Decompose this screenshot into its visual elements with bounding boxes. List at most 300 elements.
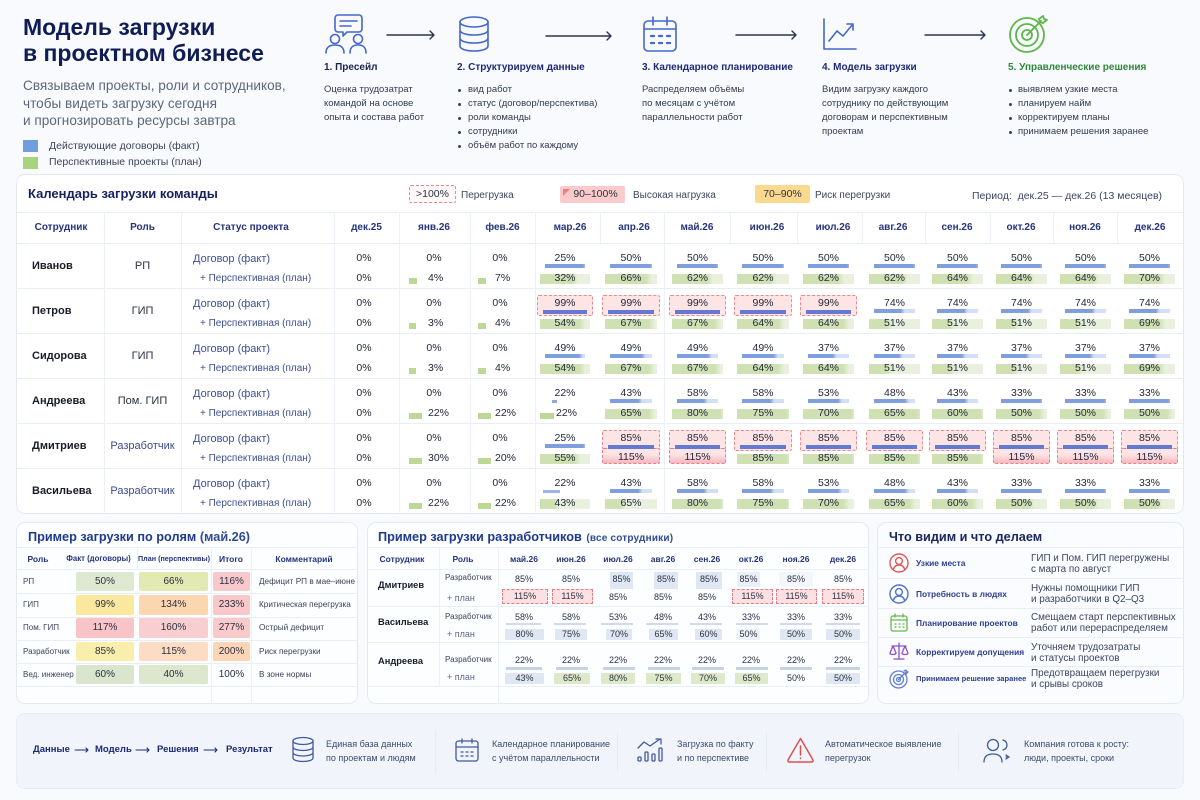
role: Вед. инженер: В зоне нормы <box>259 670 311 679</box>
row: Иванов: 62% <box>752 272 774 284</box>
employee: Дмитриев: 85% <box>739 574 758 584</box>
row: Дмитриев: 55% <box>554 452 576 464</box>
step 3: calendar planning: Распределяем объёмы <box>642 84 744 95</box>
row: Васильева: 22% <box>554 477 576 489</box>
feature: ready to grow: люди, проекты, сроки <box>1024 753 1114 763</box>
icon: database <box>459 16 489 52</box>
arrow 3 <box>735 30 797 40</box>
row: Андреева: 65% <box>884 407 905 419</box>
role: ГИП: 99% <box>95 599 115 610</box>
row: Андреева: + Перспективная (план) <box>200 408 311 419</box>
row: Петров: 74% <box>1139 297 1160 309</box>
row: Иванов: 64% <box>947 272 968 284</box>
employee: Васильева: + план <box>447 629 475 639</box>
step 5: management decisions: выявляем узкие места <box>1018 84 1118 95</box>
item: staffing needs: Нужны помощники ГИП <box>1031 583 1139 594</box>
row: Андреева: 43% <box>947 387 968 399</box>
row: Иванов: 70% <box>1139 272 1160 284</box>
row: Васильева: 43% <box>620 477 642 489</box>
employee: Дмитриев: Дмитриев <box>378 580 424 590</box>
employee: Васильева: 70% <box>610 629 628 639</box>
row: Андреева: 50% <box>1011 407 1032 419</box>
row: Андреева: 65% <box>620 407 642 419</box>
row: Сидорова: 51% <box>1011 362 1032 374</box>
row: Сидорова: 67% <box>620 362 642 374</box>
row: Иванов: 4% <box>428 272 443 284</box>
icon: database <box>292 737 314 762</box>
row: Дмитриев: 85% <box>620 432 642 444</box>
role: Разработчик: 85% <box>95 646 115 657</box>
employee: Васильева: Разработчик <box>445 612 492 621</box>
row: Васильева: 48% <box>884 477 905 489</box>
row: Сидорова: 51% <box>1075 362 1096 374</box>
row: Андреева: 75% <box>752 407 774 419</box>
employee: Андреева: Андреева <box>378 656 423 666</box>
row: Дмитриев: 85% <box>1075 432 1096 444</box>
row: Васильева: 33% <box>1075 477 1096 489</box>
row: Сидорова <box>32 342 1175 374</box>
employee: Дмитриев: 115% <box>514 591 536 601</box>
table header: май.26 <box>681 222 713 233</box>
legend: high load: 90–100% <box>573 188 618 200</box>
employee: Андреева: + план <box>447 672 475 682</box>
icon: people growth <box>983 739 1011 762</box>
row: Петров: 51% <box>1075 317 1096 329</box>
employee: Андреева: 75% <box>654 673 672 683</box>
row: Васильева: 60% <box>947 497 968 509</box>
table header: июл.26 <box>603 554 633 564</box>
row: Васильева: 50% <box>1139 497 1160 509</box>
subtitle: чтобы видеть загрузку сегодня <box>23 96 217 110</box>
step 2: structure data: 2. Структурируем данные <box>457 62 585 73</box>
arrow 4 <box>924 30 986 40</box>
step 4: load model: договорам и перспективным <box>822 112 948 123</box>
row: Андреева: 60% <box>947 407 968 419</box>
step 5: management decisions: корректируем планы <box>1018 112 1110 123</box>
row: Дмитриев: 85% <box>752 432 774 444</box>
row: Васильева: 70% <box>818 497 839 509</box>
row: Сидорова: ГИП <box>132 350 153 362</box>
row: Иванов: РП <box>135 260 150 272</box>
feature: load by fact and forecast: и по перспективе <box>677 753 749 763</box>
role: Пом. ГИП: 277% <box>219 622 244 633</box>
role: Вед. инженер: 60% <box>95 669 115 680</box>
step 4: load model: Видим загрузку каждого <box>822 84 928 95</box>
step 2: structure data: роли команды <box>468 112 531 123</box>
employee: Дмитриев: Разработчик <box>445 573 492 582</box>
employee: Андреева: 22% <box>562 655 580 665</box>
row: Петров: + Перспективная (план) <box>200 318 311 329</box>
icon: chart bars <box>637 738 663 762</box>
item: staffing needs: Потребность в людях <box>916 589 1007 599</box>
row: Андреева: 58% <box>687 387 708 399</box>
role: Разработчик: 115% <box>161 646 186 657</box>
item: adjust assumptions: Уточняем трудозатраты <box>1031 642 1140 653</box>
row: Сидорова: 49% <box>752 342 774 354</box>
row: Дмитриев: 85% <box>1139 432 1160 444</box>
row: Васильева: 0% <box>426 477 442 489</box>
row: Андреева: 0% <box>426 387 442 399</box>
panel: summary band <box>16 713 1184 789</box>
flow: data to result: Результат <box>226 744 273 755</box>
row: Петров: 0% <box>492 297 508 309</box>
row: Сидорова: 37% <box>1075 342 1096 354</box>
table header <box>27 554 333 564</box>
role: Пом. ГИП: Острый дефицит <box>259 623 324 632</box>
employee: Андреева: 50% <box>787 673 805 683</box>
item: bottlenecks <box>889 553 1169 575</box>
row: Дмитриев: 115% <box>1136 451 1163 463</box>
row: Дмитриев: 0% <box>426 432 442 444</box>
employee: Васильева: 33% <box>742 612 760 622</box>
table header: апр.26 <box>618 222 650 233</box>
feature: calendar planning <box>455 733 615 769</box>
row: Дмитриев: Разработчик <box>110 440 175 452</box>
row: Дмитриев: 85% <box>884 452 905 464</box>
item: staffing needs <box>877 579 1184 608</box>
row: Иванов: 50% <box>947 252 968 264</box>
step 1: presale: Оценка трудозатрат <box>324 84 413 95</box>
item: adjust assumptions <box>877 638 1184 666</box>
table header: Итого <box>219 554 243 564</box>
employee: Дмитриев <box>378 572 864 604</box>
row: Иванов: 50% <box>752 252 774 264</box>
row: Сидорова: 51% <box>884 362 905 374</box>
employee: Васильева: 48% <box>654 612 672 622</box>
employee: Андреева: 22% <box>654 655 672 665</box>
employee: Васильева: 33% <box>787 612 805 622</box>
employee: Васильева: 75% <box>562 629 580 639</box>
role: ГИП: 134% <box>161 599 186 610</box>
row: Андреева: Пом. ГИП <box>118 395 167 407</box>
row: Андреева: 43% <box>620 387 642 399</box>
row: Дмитриев: 85% <box>947 432 968 444</box>
title: Модель загрузки <box>23 14 215 40</box>
employee: Васильева: 60% <box>699 629 718 639</box>
step 3: calendar planning: параллельности работ <box>642 112 743 123</box>
legend: project types <box>23 140 202 169</box>
row: Петров: 74% <box>947 297 968 309</box>
row: Иванов: 0% <box>356 252 372 264</box>
row: Андреева: 50% <box>1075 407 1096 419</box>
table header: окт.26 <box>1006 222 1036 233</box>
table header <box>380 554 856 564</box>
table header: дек.26 <box>1135 222 1165 233</box>
step 1: presale: опыта и состава работ <box>324 112 424 123</box>
row: Васильева: 50% <box>1011 497 1032 509</box>
row: Андреева: 58% <box>752 387 774 399</box>
icon: person red <box>889 553 909 573</box>
employee: Андреева: 22% <box>515 655 533 665</box>
row: Дмитриев: 0% <box>356 452 372 464</box>
employee: Андреева: 22% <box>698 655 716 665</box>
row: Петров: 51% <box>884 317 905 329</box>
row: Иванов: 50% <box>1011 252 1032 264</box>
table header: Факт (договоры) <box>66 554 131 563</box>
row: Петров: Петров <box>32 305 71 317</box>
row: Васильева: 43% <box>947 477 968 489</box>
subtitle <box>23 78 286 128</box>
row: Петров: 74% <box>1011 297 1032 309</box>
employee: Андреева: 50% <box>834 673 852 683</box>
row: Сидорова: Договор (факт) <box>193 343 270 355</box>
feature: calendar planning: Календарное планирование <box>492 739 610 749</box>
table header: сен.26 <box>694 554 720 564</box>
role: Пом. ГИП: 160% <box>161 622 186 633</box>
table header: Роль <box>130 222 155 233</box>
row: Дмитриев: 85% <box>947 452 968 464</box>
row: Андреева: Андреева <box>32 395 85 407</box>
table header: ноя.26 <box>1069 222 1101 233</box>
table header: Статус проекта <box>213 222 289 233</box>
row: Дмитриев: 0% <box>492 432 508 444</box>
row: Васильева: 65% <box>620 497 642 509</box>
role: ГИП <box>23 595 351 615</box>
row: Петров: 0% <box>356 317 372 329</box>
table header: авг.26 <box>651 554 675 564</box>
icon: target blue <box>889 669 909 689</box>
row: Иванов: 50% <box>1139 252 1160 264</box>
employee: Васильева: 65% <box>654 629 672 639</box>
step 5: management decisions: планируем найм <box>1018 98 1091 109</box>
row: Петров: 67% <box>687 317 708 329</box>
row: Дмитриев: 115% <box>1008 451 1035 463</box>
role: Разработчик: Разработчик <box>23 647 70 656</box>
row: Сидорова: 51% <box>947 362 968 374</box>
row: Дмитриев: 30% <box>428 452 449 464</box>
row: Васильева: 80% <box>687 497 708 509</box>
legend: overload: Перегрузка <box>461 190 514 201</box>
row: Сидорова: 64% <box>818 362 839 374</box>
row: Сидорова: 67% <box>687 362 708 374</box>
table header: окт.26 <box>739 554 763 564</box>
row: Андреева: 22% <box>556 407 577 419</box>
row: Васильева: 65% <box>884 497 905 509</box>
row: Андреева: 80% <box>687 407 708 419</box>
employee: Андреева: Разработчик <box>445 655 492 664</box>
row: Васильева <box>32 477 1175 509</box>
role: Вед. инженер: Вед. инженер <box>23 670 74 679</box>
row: Сидорова: 3% <box>428 362 443 374</box>
row: Иванов: 62% <box>818 272 839 284</box>
row: Сидорова: Сидорова <box>32 350 87 362</box>
row: Андреева: 22% <box>554 387 576 399</box>
row: Иванов: 50% <box>884 252 905 264</box>
panel: developers load <box>367 522 869 704</box>
employee: Дмитриев: 85% <box>787 574 805 584</box>
employee: Дмитриев: 115% <box>741 591 764 601</box>
item: bottlenecks: Узкие места <box>916 558 965 568</box>
employee: Васильева: 58% <box>515 612 533 622</box>
row: Петров: 74% <box>884 297 905 309</box>
role: Разработчик: 200% <box>219 646 244 657</box>
step 3: calendar planning: 3. Календарное планирование <box>642 62 793 73</box>
row: Иванов <box>32 252 1175 284</box>
row: Иванов: Иванов <box>32 260 73 272</box>
role: РП: 66% <box>163 576 184 587</box>
flow: data to result: Решения <box>157 744 199 755</box>
row: Петров: 67% <box>620 317 642 329</box>
legend: high load: Высокая нагрузка <box>633 190 716 201</box>
item: adjust assumptions: Корректируем допущения <box>916 647 1024 657</box>
row: Петров: 4% <box>495 317 510 329</box>
arrow 1 <box>386 30 435 40</box>
employee: Васильева: 80% <box>515 629 534 639</box>
legend: project types: Перспективные проекты (план) <box>49 156 202 168</box>
employee: Дмитриев: 115% <box>832 591 854 601</box>
row: Васильева: Договор (факт) <box>193 478 270 490</box>
row: Петров: 64% <box>818 317 839 329</box>
legend: overload risk: Риск перегрузки <box>815 190 890 201</box>
role: Пом. ГИП: Пом. ГИП <box>23 623 59 632</box>
table header: ноя.26 <box>782 554 810 564</box>
table header: мар.26 <box>554 222 586 233</box>
step 4: load model: проектам <box>822 126 863 137</box>
employee: Васильева: Васильева <box>378 617 428 627</box>
item: decide early: Предотвращаем перегрузки <box>1031 668 1159 679</box>
row: Васильева: Разработчик <box>110 485 175 497</box>
row: Васильева: 0% <box>356 497 372 509</box>
employee: Васильева: 33% <box>834 612 852 622</box>
heading: Пример загрузки по ролям (май.26) <box>28 530 250 544</box>
step 2: structure data: вид работ <box>468 84 512 95</box>
item: bottlenecks: ГИП и Пом. ГИП перегружены <box>1031 553 1169 564</box>
flow: data to result: Модель <box>95 744 132 755</box>
icon: scales <box>889 641 909 661</box>
employee: Андреева <box>378 655 860 684</box>
employee: Дмитриев: 85% <box>654 592 672 602</box>
employee: Васильева: 50% <box>787 629 805 639</box>
employee: Дмитриев: + план <box>447 593 475 603</box>
step 3: calendar planning: по месяцам с учётом <box>642 98 735 109</box>
step 5: management decisions <box>1008 15 1148 137</box>
item: decide early: и срывы сроков <box>1031 679 1103 690</box>
step 4: load model: 4. Модель загрузки <box>822 62 917 73</box>
employee: Андреева: 80% <box>609 673 627 683</box>
title: в проектном бизнесе <box>23 40 264 66</box>
row: Дмитриев: 0% <box>356 432 372 444</box>
legend: overload: >100% <box>416 188 449 200</box>
row: Васильева: 53% <box>818 477 839 489</box>
table header: сен.26 <box>941 222 973 233</box>
row: Иванов: 64% <box>1011 272 1032 284</box>
row: Дмитриев: 115% <box>684 451 711 463</box>
row: Андреева: 0% <box>356 407 372 419</box>
step 2: structure data: объём работ по каждому <box>468 140 578 151</box>
employee: Дмитриев: 85% <box>515 574 533 584</box>
icon: target <box>1009 15 1048 53</box>
row: Иванов: 32% <box>554 272 576 284</box>
employee: Андреева: 65% <box>742 673 760 683</box>
item: project planning: работ или перераспределяем <box>1031 623 1168 634</box>
row: Иванов: 7% <box>495 272 510 284</box>
employee: Дмитриев: 115% <box>561 591 584 601</box>
row: Васильева: 0% <box>356 477 372 489</box>
employee: Андреева: 22% <box>609 655 627 665</box>
item: bottlenecks: с марта по август <box>1031 564 1111 575</box>
row: Иванов: 50% <box>1075 252 1096 264</box>
employee: Васильева: 43% <box>698 612 716 622</box>
row: Васильева: 43% <box>554 497 576 509</box>
row: Васильева: 33% <box>1139 477 1160 489</box>
row: Иванов: 25% <box>554 252 576 264</box>
role: Разработчик <box>23 642 321 661</box>
employee: Васильева: 53% <box>609 612 627 622</box>
row: Петров: Договор (факт) <box>193 298 270 310</box>
row: Дмитриев: 85% <box>818 432 839 444</box>
employee: Дмитриев: 85% <box>562 574 580 584</box>
row: Иванов: 0% <box>426 252 442 264</box>
row: Дмитриев: 85% <box>818 452 839 464</box>
row: Иванов: + Перспективная (план) <box>200 273 311 284</box>
role: РП: 116% <box>219 576 244 587</box>
item: project planning: Смещаем старт перспективных <box>1031 612 1176 623</box>
table header: дек.25 <box>351 222 382 233</box>
row: Сидорова: 49% <box>554 342 576 354</box>
row: Андреева: 22% <box>428 407 449 419</box>
item: staffing needs: и разработчики в Q2–Q3 <box>1031 594 1144 605</box>
feature: calendar planning: с учётом параллельности <box>492 753 600 763</box>
item: adjust assumptions: и статусы проектов <box>1031 653 1120 664</box>
row: Дмитриев: 85% <box>884 432 905 444</box>
row: Дмитриев: + Перспективная (план) <box>200 453 311 464</box>
table header: янв.26 <box>418 222 450 233</box>
row: Сидорова: 37% <box>1011 342 1032 354</box>
row: Васильева: 58% <box>687 477 708 489</box>
icon: people with chat bubble <box>325 14 367 54</box>
feature: overload detection: Автоматическое выявление <box>825 739 941 749</box>
legend: high load <box>560 186 716 203</box>
row: Васильева: 22% <box>428 497 449 509</box>
step 2: structure data: сотрудники <box>468 126 517 137</box>
table header: Роль <box>452 554 474 564</box>
legend: overload risk <box>755 185 890 203</box>
row: Васильева: 75% <box>752 497 774 509</box>
role: Пом. ГИП <box>23 618 324 638</box>
row: Андреева <box>32 387 1175 419</box>
role: Вед. инженер: 40% <box>163 669 184 680</box>
table header <box>35 222 1166 233</box>
role: Разработчик: Риск перегрузки <box>259 647 321 656</box>
row: Андреева: 48% <box>884 387 905 399</box>
icon: warning triangle <box>787 737 814 763</box>
role: Вед. инженер: 100% <box>219 669 244 680</box>
row: Васильева: 0% <box>492 477 508 489</box>
row: Васильева: Васильева <box>32 485 92 497</box>
role: РП <box>23 572 355 591</box>
employee: Андреева: 22% <box>742 655 760 665</box>
item: project planning <box>877 609 1184 637</box>
row: Дмитриев: 115% <box>618 451 644 463</box>
employee: Дмитриев: 115% <box>785 591 808 601</box>
feature: load by fact and forecast: Загрузка по факту <box>677 739 753 749</box>
item: project planning: Планирование проектов <box>916 618 1018 628</box>
row: Иванов: Договор (факт) <box>193 253 270 265</box>
step 2: structure data: статус (договор/перспектива) <box>468 98 597 109</box>
role: ГИП: ГИП <box>23 600 39 609</box>
row: Дмитриев: 85% <box>687 432 708 444</box>
heading: Что видим и что делаем <box>889 530 1042 544</box>
heading: Пример загрузки разработчиков (все сотрудники) <box>378 530 673 544</box>
flow: data to result: Данные <box>33 744 70 755</box>
role: Пом. ГИП: 117% <box>93 622 117 633</box>
employee: Дмитриев: 85% <box>609 592 627 602</box>
subtitle: и прогнозировать ресурсы завтра <box>23 113 236 128</box>
table header: Комментарий <box>275 554 333 564</box>
feature: ready to grow <box>983 733 1153 769</box>
row: Сидорова: 37% <box>1139 342 1160 354</box>
row: Петров: 0% <box>356 297 372 309</box>
